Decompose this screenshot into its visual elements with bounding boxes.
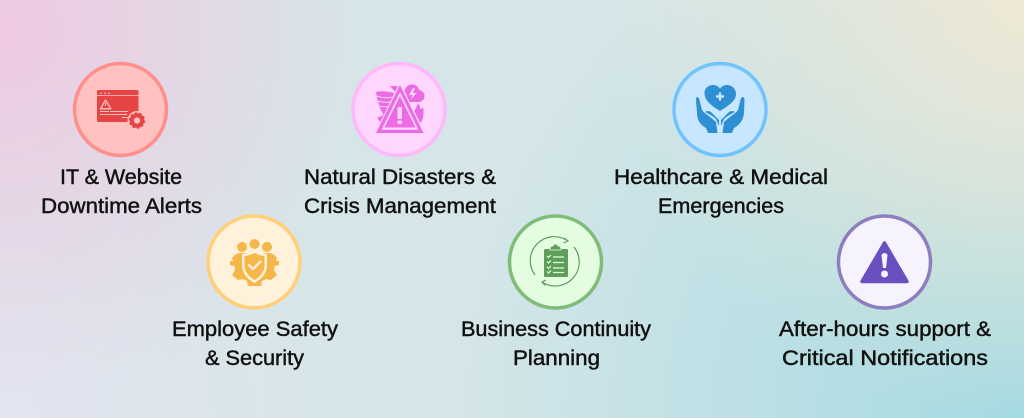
- label: Natural Disasters &: [304, 166, 496, 189]
- label: [779, 318, 991, 370]
- item: Business Continuity Planning: [461, 216, 652, 370]
- icon: clipboard checklist with cycle arrows: [510, 216, 602, 308]
- label: [172, 318, 339, 370]
- label: [41, 166, 202, 218]
- label: & Security: [205, 347, 305, 370]
- label: Emergencies: [658, 195, 784, 218]
- icon: hazard triangle with tornado and storm: [353, 64, 445, 156]
- label: Business Continuity: [461, 318, 652, 341]
- label: After-hours support &: [779, 318, 991, 341]
- label: Downtime Alerts: [41, 195, 202, 218]
- item: After-hours support & Critical Notifications: [779, 216, 991, 370]
- label: [304, 166, 496, 218]
- label: Crisis Management: [304, 195, 496, 218]
- label: Critical Notifications: [782, 347, 988, 370]
- icon: hands holding heart: [674, 64, 766, 156]
- label: Employee Safety: [172, 318, 339, 341]
- item: IT & Website Downtime Alerts: [41, 64, 202, 218]
- item: Healthcare & Medical Emergencies: [614, 64, 828, 218]
- label: [614, 166, 828, 218]
- label: IT & Website: [60, 166, 182, 189]
- label: Healthcare & Medical: [614, 166, 828, 189]
- item: Employee Safety & Security: [172, 216, 339, 370]
- icon: website alert with gear: [74, 64, 166, 156]
- icon: warning triangle: [838, 216, 930, 308]
- icon: team, gear and shield: [208, 216, 300, 308]
- label: Planning: [513, 347, 600, 370]
- item: Natural Disasters & Crisis Management: [304, 64, 496, 218]
- label: [461, 318, 652, 370]
